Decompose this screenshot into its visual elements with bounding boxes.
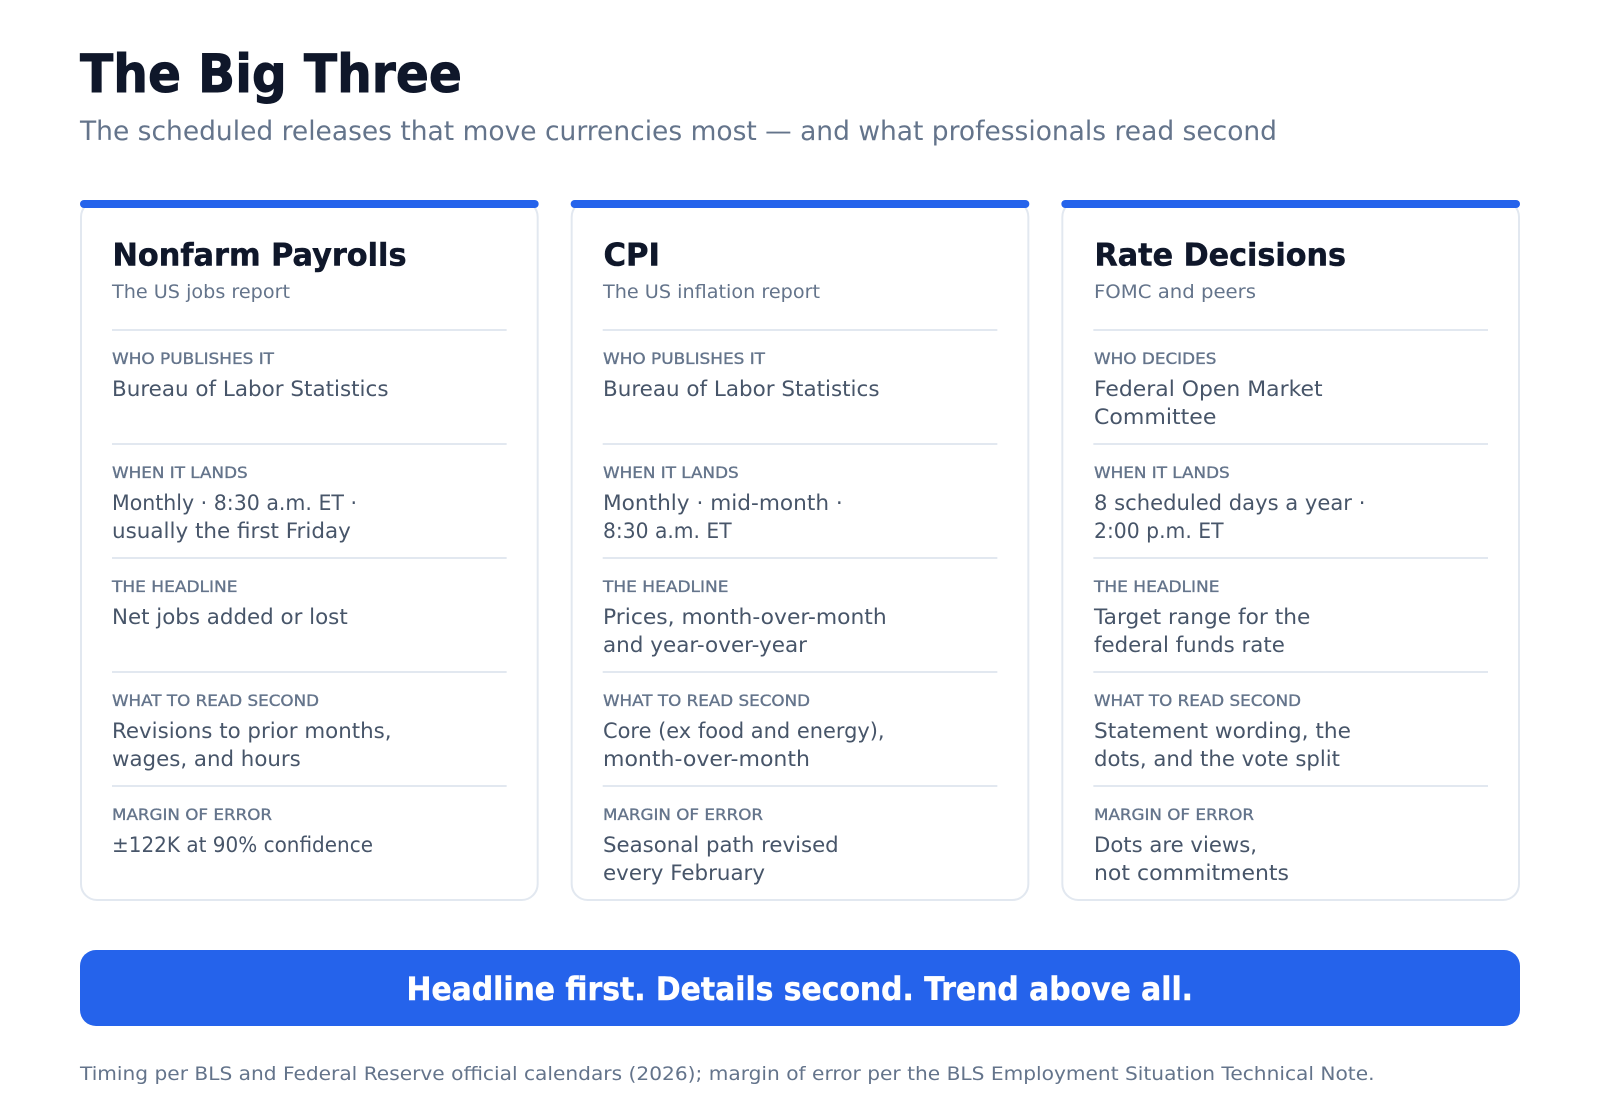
row: the headline: THE HEADLINE: [111, 577, 238, 596]
panel: Rate Decisions: [1061, 200, 1520, 900]
row: what to read second: wages, and hours: [112, 747, 301, 771]
row: the headline: [111, 577, 348, 629]
row: what to read second: month-over-month: [603, 747, 810, 771]
row: who publishes it: Bureau of Labor Statistics: [603, 377, 880, 401]
row: margin of error: [112, 805, 373, 857]
row: the headline: Net jobs added or lost: [112, 605, 348, 629]
row: margin of error: MARGIN OF ERROR: [1094, 805, 1254, 824]
row: the headline: [602, 577, 887, 657]
row: what to read second: Revisions to prior months,: [112, 719, 392, 743]
row: margin of error: MARGIN OF ERROR: [112, 805, 272, 824]
card heading: CPI: [604, 238, 660, 274]
card subheading: The US jobs report: [111, 281, 290, 303]
row: who decides: Committee: [1094, 405, 1216, 429]
row: the headline: and year-over-year: [603, 633, 807, 657]
row: the headline: Prices, month-over-month: [603, 605, 887, 629]
title: The Big Three: [80, 44, 462, 105]
row: the headline: THE HEADLINE: [1093, 577, 1220, 596]
row: what to read second: [603, 691, 885, 771]
row: who publishes it: [112, 349, 388, 401]
row: when it lands: Monthly · mid-month ·: [603, 491, 843, 515]
row: what to read second: [112, 691, 392, 771]
row: what to read second: dots, and the vote split: [1094, 747, 1340, 771]
row: what to read second: Statement wording, the: [1094, 719, 1351, 743]
card heading: Rate Decisions: [1094, 238, 1346, 274]
row: when it lands: usually the first Friday: [112, 519, 351, 543]
row: who publishes it: WHO PUBLISHES IT: [112, 349, 274, 368]
row: margin of error: Dots are views,: [1094, 833, 1257, 857]
row: when it lands: 2:00 p.m. ET: [1094, 519, 1224, 543]
panel: CPI: [571, 200, 1029, 900]
row: margin of error: [603, 805, 839, 885]
row: what to read second: WHAT TO READ SECOND: [112, 691, 319, 710]
row: what to read second: WHAT TO READ SECOND: [1094, 691, 1301, 710]
row: margin of error: MARGIN OF ERROR: [603, 805, 763, 824]
callout banner: [80, 950, 1520, 1026]
row: when it lands: 8:30 a.m. ET: [603, 519, 732, 543]
row: margin of error: every February: [603, 861, 765, 885]
row: the headline: THE HEADLINE: [602, 577, 728, 596]
row: the headline: [1093, 577, 1310, 657]
row: margin of error: not commitments: [1094, 861, 1289, 885]
row: when it lands: [1094, 463, 1365, 543]
row: when it lands: WHEN IT LANDS: [603, 463, 739, 482]
row: who publishes it: [603, 349, 880, 401]
card subheading: FOMC and peers: [1094, 281, 1256, 303]
row: when it lands: [603, 463, 843, 543]
row: the headline: federal funds rate: [1094, 633, 1285, 657]
row: when it lands: WHEN IT LANDS: [112, 463, 248, 482]
row: what to read second: [1094, 691, 1351, 771]
row: when it lands: WHEN IT LANDS: [1094, 463, 1230, 482]
subtitle: The scheduled releases that move currencies most — and what professionals read second: [79, 116, 1277, 147]
row: when it lands: [112, 463, 357, 543]
row: who decides: WHO DECIDES: [1094, 349, 1216, 368]
footnote: Timing per BLS and Federal Reserve official calendars (2026); margin of error per the BLS Employment Situation Technical Note.: [79, 1063, 1375, 1085]
card heading: Nonfarm Payrolls: [112, 238, 406, 274]
row: margin of error: ±122K at 90% confidence: [112, 833, 373, 857]
row: the headline: Target range for the: [1093, 605, 1310, 629]
row: what to read second: WHAT TO READ SECOND: [603, 691, 810, 710]
row: margin of error: [1094, 805, 1289, 885]
row: who decides: [1094, 349, 1323, 429]
card subheading: The US inflation report: [602, 281, 820, 303]
row: what to read second: Core (ex food and energy),: [603, 719, 885, 743]
panel: Nonfarm Payrolls: [80, 200, 539, 900]
row: margin of error: Seasonal path revised: [603, 833, 839, 857]
row: who publishes it: WHO PUBLISHES IT: [603, 349, 765, 368]
row: when it lands: Monthly · 8:30 a.m. ET ·: [112, 491, 357, 515]
callout banner: Headline first. Details second. Trend above all.: [406, 970, 1193, 1008]
row: when it lands: 8 scheduled days a year ·: [1094, 491, 1365, 515]
row: who decides: Federal Open Market: [1094, 377, 1323, 401]
row: who publishes it: Bureau of Labor Statistics: [112, 377, 388, 401]
